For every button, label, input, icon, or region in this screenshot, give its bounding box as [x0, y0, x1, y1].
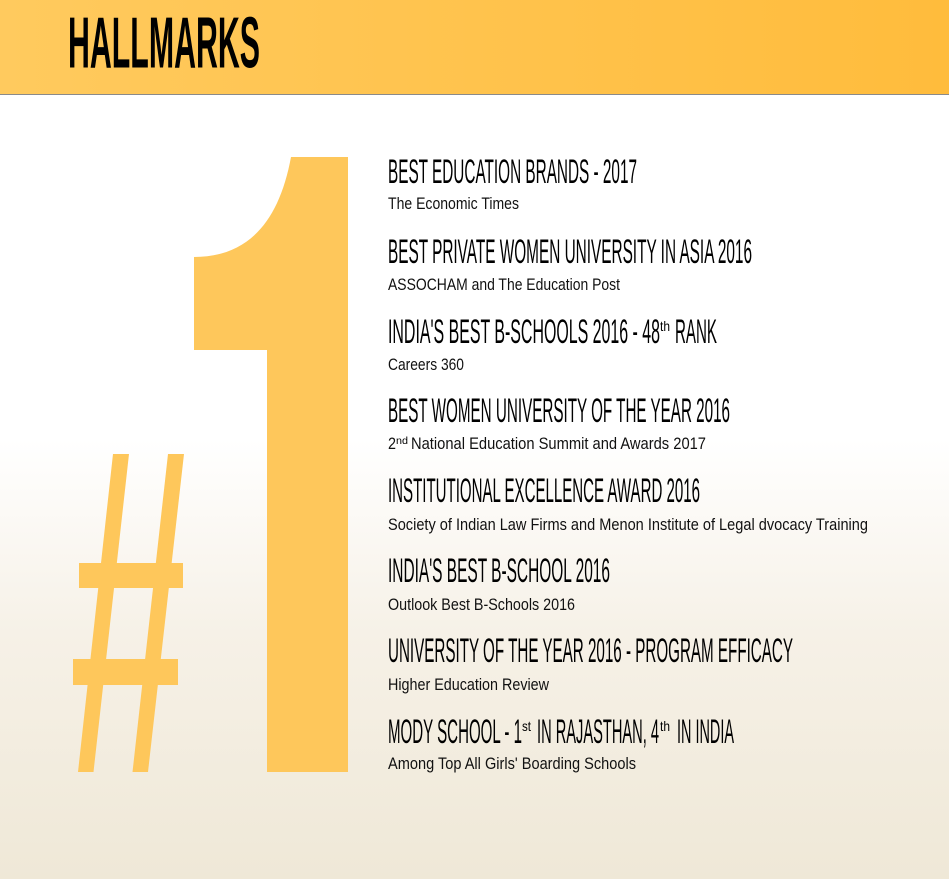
award: best women university: National Education Summit and Awards 2017 — [411, 435, 706, 453]
award: best education brands — [388, 153, 637, 213]
award list: BEST EDUCATION BRANDS - 2017 — [388, 153, 637, 191]
award: university of the year: Higher Education Review — [388, 676, 549, 694]
award: India's best b-schools: th — [660, 318, 670, 334]
header band — [0, 0, 949, 95]
award: Mody School: Among Top All Girls' Boarding Schools — [388, 755, 636, 773]
award: Mody School: st — [522, 718, 531, 734]
award: best education brands: The Economic Times — [388, 195, 519, 213]
award: best private women university: ASSOCHAM and The Education Post — [388, 276, 620, 294]
award: India's best b-schools — [388, 313, 717, 374]
award list — [388, 153, 868, 773]
award list: RANK — [675, 313, 717, 351]
award: best women university: nd — [396, 436, 408, 447]
large numeral one — [194, 157, 348, 772]
award: best women university — [388, 392, 730, 453]
award: Mody School: MODY SCHOOL - 1 — [388, 713, 522, 751]
award: Mody School — [388, 713, 734, 773]
award list: IN INDIA — [677, 713, 734, 751]
award: Mody School: IN RAJASTHAN, 4 — [537, 713, 659, 751]
award: India's best b-school — [388, 552, 610, 614]
award: institutional excellence: Society of Indian Law Firms and Menon Institute of Legal dvocacy Training — [388, 516, 868, 534]
award: India's best b-school: Outlook Best B-Schools 2016 — [388, 596, 575, 614]
award: Mody School: th — [660, 718, 670, 734]
award: best private women university — [388, 233, 752, 294]
award: university of the year — [388, 632, 793, 694]
award: best women university: 2 — [388, 435, 396, 453]
large hash symbol — [73, 454, 184, 772]
award: institutional excellence — [388, 472, 868, 534]
award list: INDIA'S BEST B-SCHOOL 2016 — [388, 552, 610, 590]
text: HALLMARKS — [68, 4, 260, 84]
award: India's best b-schools: Careers 360 — [388, 356, 464, 374]
